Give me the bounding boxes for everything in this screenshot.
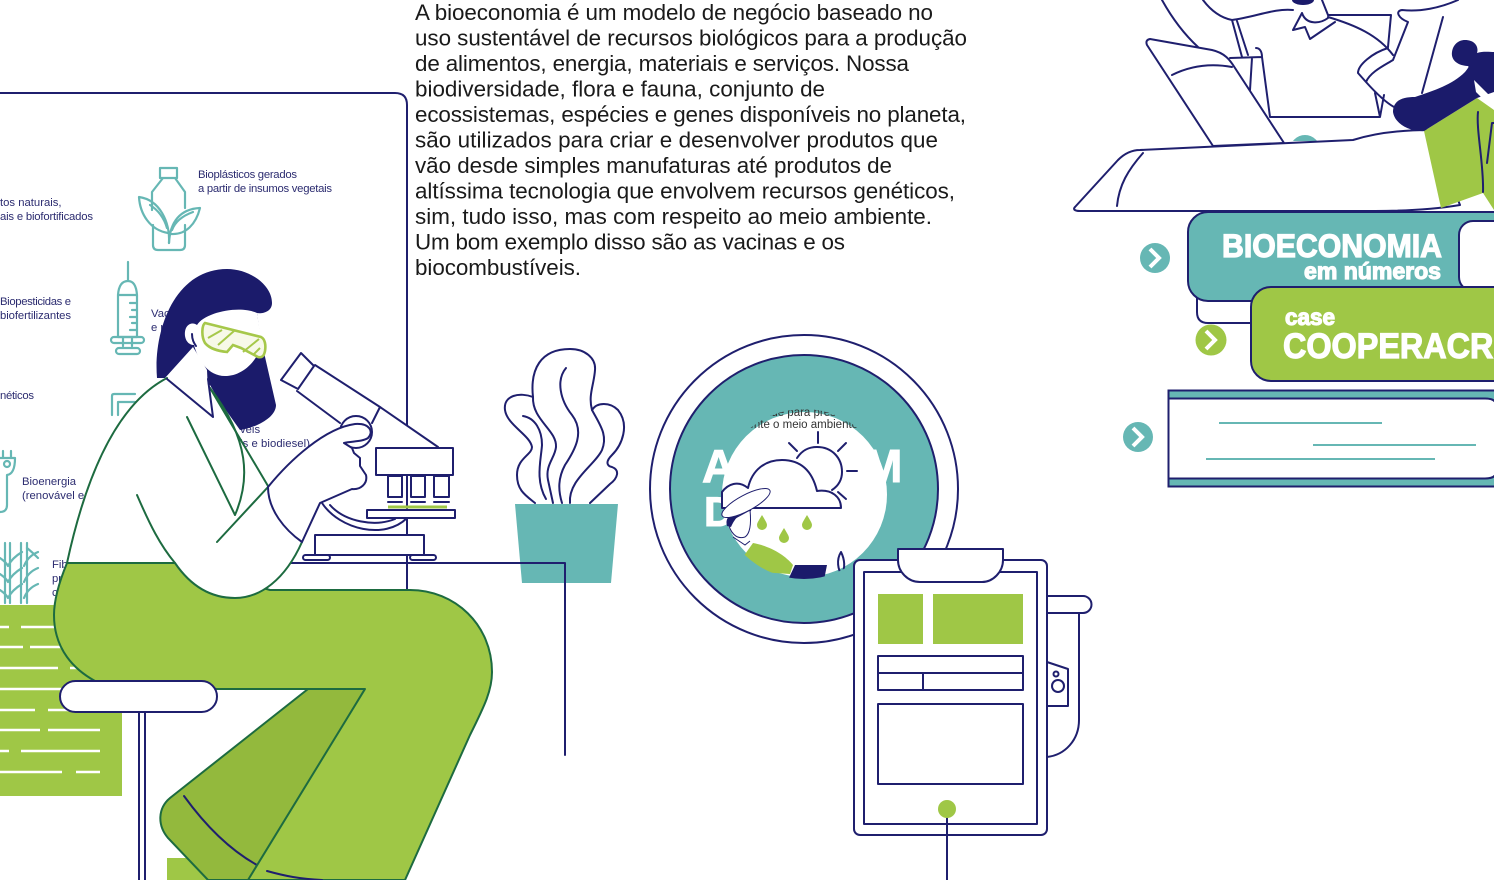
panel: bioeconomy products (0, 93, 407, 603)
heading: case: case (1285, 304, 1335, 330)
arrow button lime (1196, 324, 1226, 356)
text: product labels: Biopesticidas e (0, 296, 71, 308)
text: product labels: tos naturais, (0, 197, 62, 209)
clipboard clip (898, 549, 1003, 582)
badge title letters: M (864, 440, 902, 492)
badge small text: efetivamente o meio ambiente (704, 419, 858, 431)
connector dot and line (938, 800, 956, 880)
hand and sleeve (268, 424, 371, 542)
neck (165, 347, 208, 400)
collar and seam (1474, 80, 1494, 110)
laptop (1146, 39, 1284, 146)
text block: bioeconomy description: são utilizados para criar e desenvolver produtos que (415, 128, 938, 152)
text: product labels: Bioenergia (22, 476, 77, 488)
badge title letters (702, 440, 902, 535)
lime blocks (878, 594, 1023, 644)
icon: fibres (0, 543, 38, 603)
white tab behind (1197, 295, 1260, 323)
desk curve (1117, 153, 1143, 206)
clipboard (854, 549, 1047, 880)
lab coat (67, 378, 302, 598)
icon: cosmetics box (112, 394, 135, 415)
desk (1074, 130, 1460, 211)
text: product labels: (renovável e limpa) (22, 490, 118, 502)
badge title letters: A (702, 440, 735, 492)
lime top (1424, 98, 1494, 210)
farmer (727, 505, 844, 580)
hair (1393, 40, 1494, 131)
icon: bottle with leaves (139, 168, 200, 250)
text block: bioeconomy description: ecossistemas, espécies e genes disponíveis no planeta, (415, 102, 966, 127)
text block: bioeconomy description: uso sustentável de recursos biológicos para a produção (415, 26, 967, 50)
text block: bioeconomy description: biocombustíveis. (415, 255, 581, 280)
sun (789, 432, 857, 499)
teal dome (1293, 135, 1317, 141)
mug behind clipboard (1047, 596, 1092, 757)
text: product labels: e produtos (151, 322, 205, 334)
form fields (878, 656, 1023, 690)
farmer hat (718, 483, 774, 523)
text block: bioeconomy description: de alimentos, energia, materiais e serviços. Nossa (415, 51, 910, 76)
stool (60, 681, 217, 880)
text block: bioeconomy description: vão desde simples manufaturas até produtos de (415, 153, 892, 178)
collar (1293, 0, 1335, 39)
circular badge (650, 335, 958, 643)
arrow button teal upper (1140, 243, 1170, 273)
laptop curve (1172, 65, 1232, 75)
back leg (160, 689, 365, 880)
lime tab (1251, 287, 1494, 381)
lime rectangle behind leg (167, 858, 211, 880)
rain drops (757, 515, 812, 543)
badge small text (750, 410, 857, 428)
badge title letters: D (704, 488, 734, 535)
text block: bioeconomy description: biodiversidade, flora e fauna, conjunto de (415, 76, 825, 102)
text block: bioeconomy description: sim, tudo isso, mas com respeito ao meio ambiente. (415, 204, 932, 229)
icon: power plug (0, 451, 15, 512)
badge small text: sustentabilidade para preservar (701, 407, 862, 419)
text: product labels: veis (240, 424, 260, 436)
ear detail (192, 334, 196, 346)
text block: bioeconomy description: A bioeconomia é um modelo de negócio baseado no (415, 0, 933, 25)
text: product labels: Bioplásticos gerados (198, 169, 297, 181)
subheading: em numeros: em números (1304, 258, 1441, 284)
tabs: bioeconomy in numbers (1188, 212, 1494, 381)
text: product labels: pr (52, 573, 62, 585)
text block: bioeconomy description: altíssima tecnologia que envolvem recursos genéticos, (415, 178, 955, 204)
face (185, 310, 262, 376)
lime text panel (0, 605, 122, 796)
icon: syringe (111, 262, 144, 354)
large field (878, 704, 1023, 784)
text: product labels: c (52, 587, 58, 599)
text: product labels (0, 169, 332, 599)
shirt and arm lines (1162, 0, 1458, 117)
text: product labels: ais e biofortificados (0, 211, 93, 223)
trousers (54, 563, 492, 880)
text block: bioeconomy description (415, 0, 967, 280)
bottom right card (1168, 390, 1494, 486)
heading: bioeconomia: BIOECONOMIA (1222, 228, 1442, 264)
text block: bioeconomy description: Um bom exemplo disso são as vacinas e os (415, 230, 845, 254)
text: product labels: biofertilizantes (0, 310, 71, 322)
chin (1292, 0, 1314, 5)
illustration: scientist at microscope (54, 269, 492, 880)
text: product labels: Vacinas (151, 308, 191, 320)
goggles (202, 323, 265, 357)
text: product labels: néticos (0, 390, 34, 402)
teal tab (1188, 212, 1494, 301)
text: product labels: Fibras (52, 559, 84, 571)
white pocket (1459, 221, 1494, 291)
cloud (722, 460, 841, 508)
seams (1478, 112, 1494, 192)
microscope (281, 353, 455, 560)
illustration: person with laptop (1074, 0, 1494, 211)
text: product labels: is e biodiesel) (240, 438, 310, 450)
text: product labels: a partir de insumos vegetais (198, 183, 332, 195)
table line (290, 563, 565, 755)
arrow button teal lower (1123, 422, 1153, 452)
plant in pot (490, 349, 624, 600)
hair and beard (157, 269, 276, 430)
